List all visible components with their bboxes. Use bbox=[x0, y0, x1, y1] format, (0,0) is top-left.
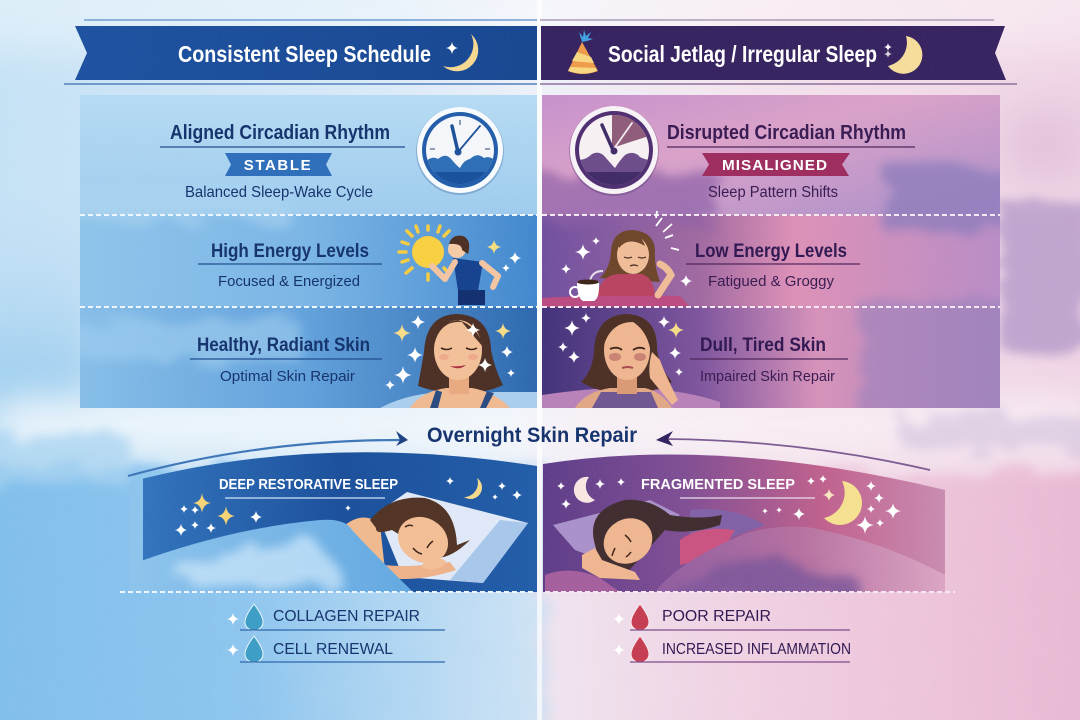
illustration: sleeping woman bbox=[345, 498, 470, 579]
label: DEEP RESTORATIVE SLEEP bbox=[219, 476, 398, 493]
arrow: right to center bbox=[656, 431, 930, 470]
item: poor repair: POOR REPAIR bbox=[662, 608, 771, 625]
item: cell renewal bbox=[227, 636, 445, 662]
illustration: pillow bbox=[553, 500, 680, 565]
arrow: left to center bbox=[128, 431, 408, 476]
icon: disrupted clock bbox=[569, 106, 659, 196]
text: Sleep Pattern Shifts bbox=[708, 184, 838, 201]
panel: fragmented sleep bbox=[543, 445, 950, 600]
icon: moon small bbox=[574, 477, 595, 503]
row: dull tired skin bbox=[542, 307, 1000, 408]
icon: stars bbox=[175, 477, 522, 536]
icon: party hat bbox=[568, 30, 598, 74]
icon: sparkles bbox=[558, 313, 684, 376]
illustration: blanket bbox=[143, 520, 412, 592]
icon: stable clock bbox=[416, 107, 504, 195]
icon: sun bbox=[399, 226, 455, 280]
list: effects of fragmented sleep bbox=[613, 604, 851, 662]
heading: High Energy Levels bbox=[211, 241, 369, 262]
panel: consistent sleep outcomes bbox=[60, 95, 537, 408]
row: high energy levels bbox=[80, 215, 537, 305]
text: Impaired Skin Repair bbox=[700, 368, 835, 385]
text: Focused & Energized bbox=[218, 273, 360, 290]
icon: stars bbox=[557, 475, 901, 534]
center divider bbox=[537, 0, 542, 720]
icon: moon large bbox=[824, 481, 862, 525]
item: collagen repair: COLLAGEN REPAIR bbox=[273, 608, 420, 625]
row: healthy radiant skin bbox=[80, 307, 537, 408]
panel: deep restorative sleep bbox=[130, 445, 537, 595]
heading: Disrupted Circadian Rhythm bbox=[667, 122, 906, 144]
badge: misaligned bbox=[702, 153, 850, 176]
text: Balanced Sleep-Wake Cycle bbox=[185, 184, 373, 201]
icon: energized runner bbox=[432, 236, 498, 305]
list: benefits of deep sleep bbox=[227, 604, 445, 662]
banner: social jetlag bbox=[540, 20, 1017, 84]
icon: crescent moon with star bbox=[443, 34, 478, 71]
icon: coffee cup bbox=[570, 280, 599, 301]
label: FRAGMENTED SLEEP bbox=[641, 476, 795, 493]
icon: crescent moon with stars bbox=[884, 36, 922, 74]
heading: Aligned Circadian Rhythm bbox=[170, 122, 390, 144]
icon: sparkles bbox=[385, 315, 515, 390]
badge: stable: STABLE bbox=[244, 157, 312, 174]
item: collagen repair bbox=[227, 604, 445, 630]
icon: moon bbox=[464, 478, 482, 499]
icon: sparkles bbox=[561, 211, 692, 287]
row: disrupted circadian rhythm bbox=[569, 106, 915, 201]
row: low energy levels bbox=[542, 211, 1000, 307]
heading: Social Jetlag / Irregular Sleep bbox=[608, 41, 877, 67]
item: increased inflammation bbox=[613, 636, 851, 662]
section title: Overnight Skin Repair bbox=[427, 424, 637, 447]
illustration: sleeping woman bbox=[545, 500, 735, 592]
text: Fatigued & Groggy bbox=[708, 273, 834, 290]
item: cell renewal: CELL RENEWAL bbox=[273, 641, 393, 658]
text: Optimal Skin Repair bbox=[220, 368, 355, 385]
heading: Low Energy Levels bbox=[695, 241, 847, 262]
badge: misaligned: MISALIGNED bbox=[722, 157, 828, 174]
icon: sparkles bbox=[487, 240, 521, 272]
illustration: tired woman with coffee bbox=[542, 230, 690, 307]
badge: stable bbox=[225, 153, 332, 176]
banner: consistent sleep schedule bbox=[64, 20, 537, 84]
item: increased inflammation: INCREASED INFLAMMATION bbox=[662, 641, 851, 658]
item: poor repair bbox=[613, 604, 850, 630]
illustration: smiling woman bbox=[380, 314, 537, 408]
illustration: pillow bbox=[377, 492, 528, 583]
illustration: tired woman bbox=[542, 314, 720, 408]
heading: Healthy, Radiant Skin bbox=[197, 335, 370, 356]
row: aligned circadian rhythm bbox=[160, 107, 504, 201]
heading: Consistent Sleep Schedule bbox=[178, 41, 431, 67]
heading: Dull, Tired Skin bbox=[700, 335, 826, 356]
illustration: blanket bbox=[650, 520, 950, 600]
panel: irregular sleep outcomes bbox=[530, 95, 1010, 420]
